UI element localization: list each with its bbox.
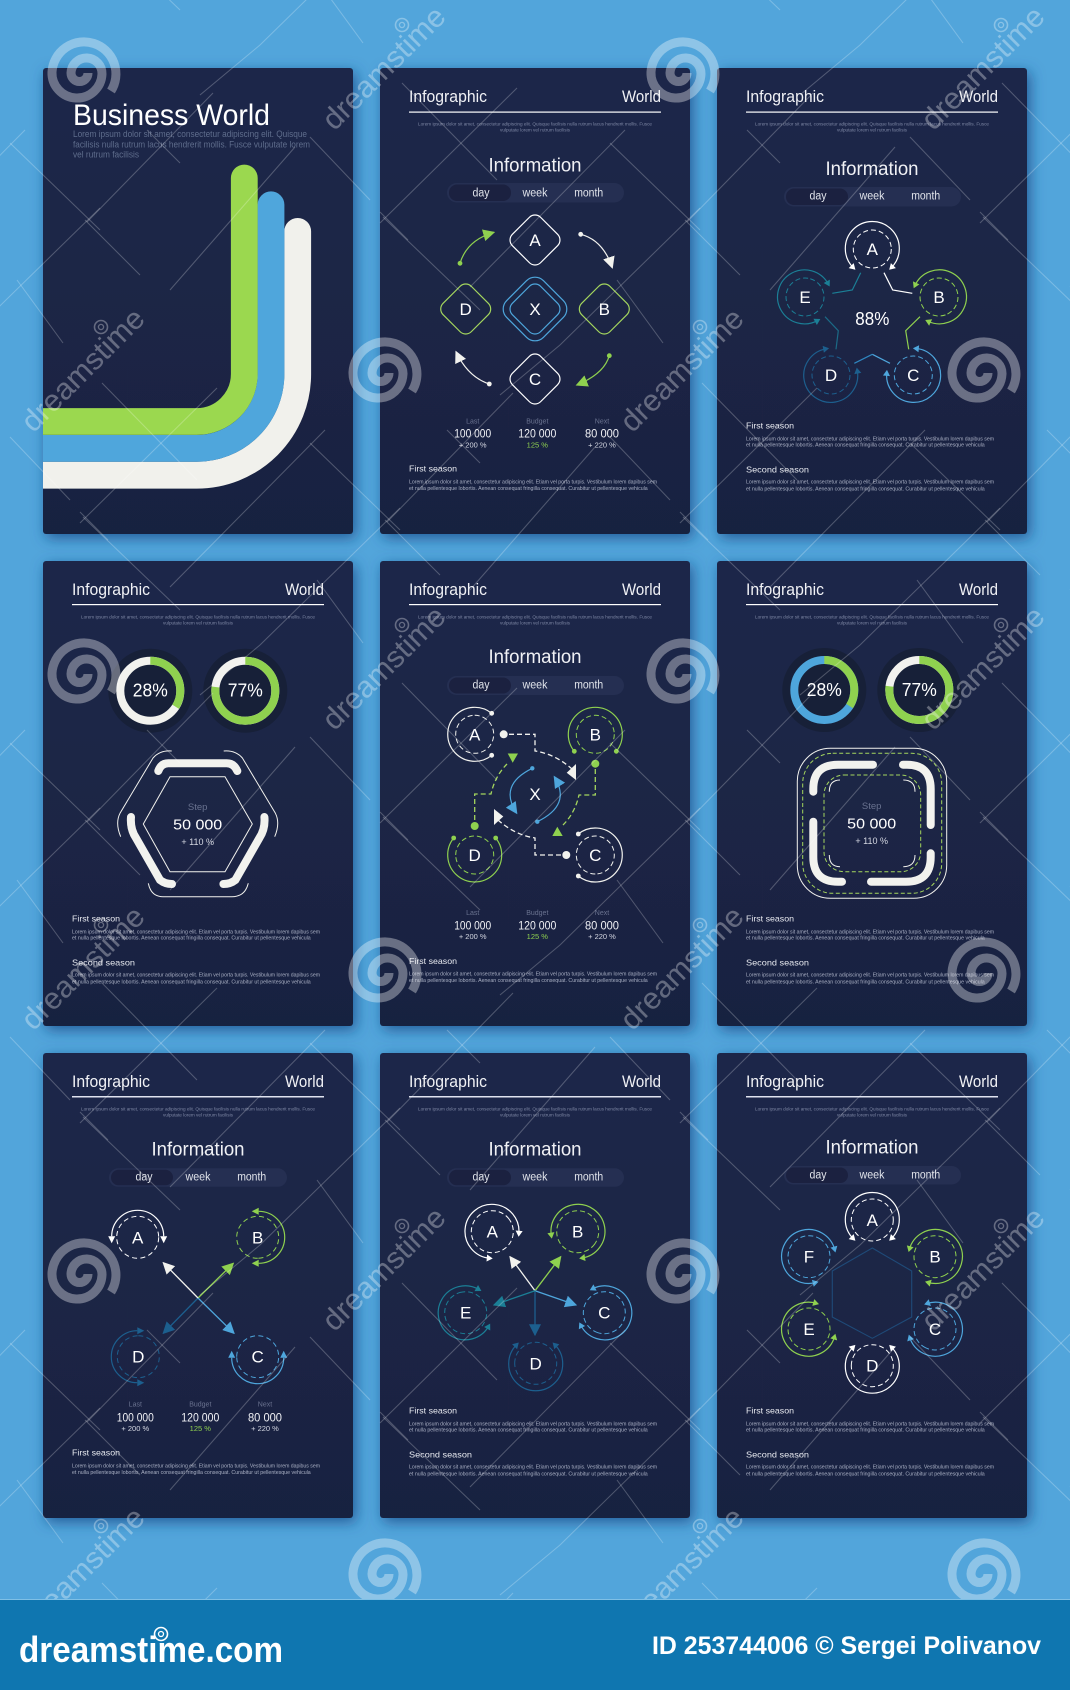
step value: 50 000 <box>173 816 222 833</box>
pentagon ring diagram <box>771 222 974 413</box>
donut 28% <box>782 648 866 732</box>
watermark overlay: dreamstime <box>915 0 1052 137</box>
header: vulputate lorem vel rutrum facilisis <box>500 1112 571 1118</box>
stats: + 200 % <box>459 932 487 941</box>
stats: 120 000 <box>518 428 556 440</box>
header: Lorem ipsum dolor sit amet, consectetur adipiscing elit. Quisque facilisis nulla rutrum lacus hendrerit mollis. Fusce <box>418 1106 653 1112</box>
first season text <box>72 1448 320 1476</box>
network diagram: B <box>590 725 601 744</box>
tabs: week <box>522 680 548 692</box>
cover subtitle <box>73 129 310 160</box>
season text: Second season <box>409 1449 472 1459</box>
radial diagram: C <box>598 1304 610 1323</box>
cover subtitle: vel rutrum facilisis <box>73 150 139 160</box>
season text: et nulla pellentesque lobortis. Aenean consequat fringilla consequat. Curabitur ut pellentesque vehicula <box>746 980 985 986</box>
stats: 120 000 <box>518 920 556 932</box>
header <box>746 87 998 132</box>
tabs: day <box>472 1172 490 1184</box>
stats: 120 000 <box>181 1413 219 1425</box>
pentagon ring diagram: A <box>867 240 879 259</box>
panel: five-way radial arrows <box>380 1053 690 1518</box>
network diagram: C <box>589 846 601 865</box>
cross diagram: D <box>132 1348 144 1367</box>
season text: First season <box>746 913 794 923</box>
season text: et nulla pellentesque lobortis. Aenean consequat fringilla consequat. Curabitur ut pellentesque vehicula <box>746 487 985 493</box>
donut 28% <box>108 649 192 733</box>
stats: 125 % <box>190 1424 211 1433</box>
donut 28%: 28% <box>133 681 168 701</box>
tabs: week <box>522 1172 548 1184</box>
season text <box>746 1405 994 1478</box>
stats: + 220 % <box>588 440 616 449</box>
first season text: Lorem ipsum dolor sit amet, consectetur adipiscing elit. Etiam vel porta turpis. Vestibulum lorem dapibus sem <box>72 1463 320 1469</box>
first season text: Lorem ipsum dolor sit amet, consectetur adipiscing elit. Etiam vel porta turpis. Vestibulum lorem dapibus sem <box>409 479 657 485</box>
season text: Lorem ipsum dolor sit amet, consectetur adipiscing elit. Etiam vel porta turpis. Vestibulum lorem dapibus sem <box>409 1421 657 1427</box>
stats <box>117 1402 282 1433</box>
panel: six-ring hexagon <box>717 1053 1027 1518</box>
stats: 100 000 <box>117 1413 154 1425</box>
tabs: day <box>810 191 827 203</box>
diamond diagram <box>437 212 633 407</box>
step value: Step <box>862 801 881 812</box>
heading: Information <box>826 1137 918 1158</box>
season text: Lorem ipsum dolor sit amet, consectetur adipiscing elit. Etiam vel porta turpis. Vestibulum lorem dapibus sem <box>409 1465 657 1471</box>
season text: et nulla pellentesque lobortis. Aenean consequat fringilla consequat. Curabitur ut pellentesque vehicula <box>409 1428 648 1434</box>
cover title: Business World <box>73 99 270 132</box>
header <box>746 1072 998 1118</box>
first season text: First season <box>409 956 457 966</box>
step value: + 110 % <box>181 837 214 847</box>
season text: First season <box>72 913 120 923</box>
watermark overlay: dreamstime <box>316 1201 453 1338</box>
step value <box>173 802 222 847</box>
season text: Lorem ipsum dolor sit amet, consectetur adipiscing elit. Etiam vel porta turpis. Vestibulum lorem dapibus sem <box>746 480 994 486</box>
step value: + 110 % <box>855 836 888 846</box>
first season text <box>409 956 657 984</box>
stats: Last <box>129 1402 142 1409</box>
pentagon ring diagram: E <box>799 288 811 307</box>
header: Infographic <box>746 87 824 106</box>
first season text: et nulla pellentesque lobortis. Aenean consequat fringilla consequat. Curabitur ut pellentesque vehicula <box>409 978 648 984</box>
cover subtitle: Lorem ipsum dolor sit amet, consectetur adipiscing elit. Quisque <box>73 129 307 139</box>
season text <box>746 420 994 493</box>
tabs: week <box>185 1172 211 1184</box>
header: World <box>959 1072 998 1091</box>
header: vulputate lorem vel rutrum facilisis <box>500 128 571 132</box>
step value: 50 000 <box>847 815 896 832</box>
stats: 80 000 <box>585 920 619 932</box>
cover subtitle: facilisis nulla rutrum lacus hendrerit mollis. Fusce vulputate lorem <box>73 139 310 149</box>
tabs: day <box>136 1172 153 1184</box>
radial diagram: A <box>487 1223 499 1242</box>
hexagon ring diagram: B <box>929 1248 941 1267</box>
first season text: Lorem ipsum dolor sit amet, consectetur adipiscing elit. Etiam vel porta turpis. Vestibulum lorem dapibus sem <box>409 971 657 977</box>
header: Infographic <box>72 1072 150 1091</box>
tabs <box>447 183 624 202</box>
heading: Information <box>826 159 918 180</box>
header: Lorem ipsum dolor sit amet, consectetur adipiscing elit. Quisque facilisis nulla rutrum lacus hendrerit mollis. Fusce <box>81 1106 316 1112</box>
header <box>72 580 324 626</box>
tabs <box>447 676 624 695</box>
season text: Second season <box>746 957 809 967</box>
panel: diamond cycle <box>380 68 690 534</box>
hexagon ring diagram: A <box>867 1211 879 1230</box>
step value: Step <box>188 802 207 813</box>
first season text: et nulla pellentesque lobortis. Aenean consequat fringilla consequat. Curabitur ut pellentesque vehicula <box>409 486 648 492</box>
tabs: month <box>574 188 603 200</box>
rounded square frame <box>797 748 947 898</box>
hexagon ring diagram: F <box>804 1248 814 1267</box>
stats: + 220 % <box>251 1424 279 1433</box>
hexagon ring diagram: D <box>866 1357 878 1376</box>
donut 77% <box>877 648 961 732</box>
watermark overlay: dreamstime <box>15 302 152 439</box>
season text: et nulla pellentesque lobortis. Aenean consequat fringilla consequat. Curabitur ut pellentesque vehicula <box>72 980 311 986</box>
header: Lorem ipsum dolor sit amet, consectetur adipiscing elit. Quisque facilisis nulla rutrum lacus hendrerit mollis. Fusce <box>81 614 316 620</box>
pentagon ring diagram: D <box>825 366 837 385</box>
stats: 100 000 <box>454 920 491 932</box>
stats: 80 000 <box>248 1413 282 1425</box>
season text: Lorem ipsum dolor sit amet, consectetur adipiscing elit. Etiam vel porta turpis. Vestibulum lorem dapibus sem <box>746 1421 994 1427</box>
season text: Second season <box>746 1449 809 1459</box>
stats: Budget <box>526 910 548 917</box>
heading: Information <box>152 1140 244 1161</box>
watermark overlay: dreamstime <box>316 600 453 737</box>
network diagram: A <box>469 725 481 744</box>
season text: et nulla pellentesque lobortis. Aenean consequat fringilla consequat. Curabitur ut pellentesque vehicula <box>746 1472 985 1478</box>
header: World <box>959 580 998 599</box>
watermark overlay: dreamstime <box>915 600 1052 737</box>
season text: et nulla pellentesque lobortis. Aenean consequat fringilla consequat. Curabitur ut pellentesque vehicula <box>409 1472 648 1478</box>
tabs <box>784 1166 961 1184</box>
panel: cover Business World <box>23 68 353 534</box>
stats: Budget <box>526 418 548 425</box>
stats: Next <box>258 1402 272 1409</box>
donut 77% <box>203 649 287 733</box>
donut 77%: 77% <box>228 681 263 701</box>
header <box>746 580 998 626</box>
footer logo: dreamstime.com <box>19 1629 283 1670</box>
season text: Lorem ipsum dolor sit amet, consectetur adipiscing elit. Etiam vel porta turpis. Vestibulum lorem dapibus sem <box>746 1465 994 1471</box>
pentagon ring diagram: B <box>933 288 945 307</box>
panel: donuts and hexagon <box>43 561 353 1026</box>
stats: 125 % <box>527 932 548 941</box>
header: vulputate lorem vel rutrum facilisis <box>837 128 908 132</box>
watermark overlay: dreamstime <box>915 1201 1052 1338</box>
tabs: week <box>859 191 885 203</box>
panel: five-step pentagon cycle <box>717 68 1027 534</box>
hexagon ring diagram <box>772 1193 972 1393</box>
tabs: month <box>911 1169 940 1181</box>
central percent: 88% <box>855 309 889 329</box>
diamond diagram: A <box>529 231 541 250</box>
header: vulputate lorem vel rutrum facilisis <box>163 620 234 626</box>
stats: Next <box>595 418 609 425</box>
tabs: day <box>810 1169 827 1181</box>
header: World <box>622 1072 661 1091</box>
watermark overlay: dreamstime <box>614 900 751 1037</box>
stats: Last <box>466 418 479 425</box>
season text <box>746 913 994 986</box>
tabs: day <box>472 188 490 200</box>
panel: X network <box>380 561 690 1026</box>
heading: Information <box>488 647 582 668</box>
donut 77%: 77% <box>902 680 937 700</box>
header: World <box>622 87 661 106</box>
first season text: First season <box>409 464 457 474</box>
header: World <box>285 580 324 599</box>
header <box>409 580 661 626</box>
season text: Second season <box>72 957 135 967</box>
stats: + 200 % <box>121 1424 149 1433</box>
curved colour bands <box>23 178 298 475</box>
header: Infographic <box>72 580 150 599</box>
watermark overlay: dreamstime <box>15 1501 152 1638</box>
season text: Lorem ipsum dolor sit amet, consectetur adipiscing elit. Etiam vel porta turpis. Vestibulum lorem dapibus sem <box>72 929 320 935</box>
heading: Information <box>488 156 582 177</box>
header: vulputate lorem vel rutrum facilisis <box>837 620 908 626</box>
header: Lorem ipsum dolor sit amet, consectetur adipiscing elit. Quisque facilisis nulla rutrum lacus hendrerit mollis. Fusce <box>418 122 653 126</box>
header: vulputate lorem vel rutrum facilisis <box>500 620 571 626</box>
tabs: month <box>574 680 603 692</box>
stats: + 200 % <box>459 440 487 449</box>
tabs: day <box>472 680 490 692</box>
header <box>409 1072 661 1118</box>
tabs <box>109 1168 287 1187</box>
stats: + 220 % <box>588 932 616 941</box>
tabs: month <box>911 191 940 203</box>
tabs <box>447 1168 624 1187</box>
tabs: week <box>522 188 548 200</box>
cross diagram: A <box>132 1228 144 1247</box>
stats: Next <box>595 910 609 917</box>
footer credit: ID 253744006 © Sergei Polivanov <box>652 1632 1041 1660</box>
cross diagram: C <box>252 1348 264 1367</box>
stats <box>454 418 619 449</box>
season text <box>409 1405 657 1478</box>
season text: Second season <box>746 464 809 474</box>
radial diagram: E <box>460 1304 471 1323</box>
header: World <box>959 87 998 106</box>
stats: Last <box>466 910 479 917</box>
tabs: week <box>859 1169 885 1181</box>
header <box>72 1072 324 1118</box>
radial diagram: B <box>572 1223 583 1242</box>
panel: crossed arrows <box>43 1053 353 1518</box>
header: Lorem ipsum dolor sit amet, consectetur adipiscing elit. Quisque facilisis nulla rutrum lacus hendrerit mollis. Fusce <box>755 1106 990 1112</box>
diamond diagram: B <box>599 300 610 319</box>
network diagram: D <box>469 846 481 865</box>
stats <box>454 910 619 941</box>
tabs <box>784 187 961 206</box>
hexagon ring diagram: E <box>803 1320 815 1339</box>
season text: First season <box>746 1405 794 1415</box>
header: Lorem ipsum dolor sit amet, consectetur adipiscing elit. Quisque facilisis nulla rutrum lacus hendrerit mollis. Fusce <box>755 614 990 620</box>
network diagram <box>448 707 622 882</box>
heading: Information <box>488 1140 582 1161</box>
watermark overlay: dreamstime <box>15 900 152 1037</box>
hexagon frame <box>118 751 278 897</box>
cross diagram <box>108 1208 287 1386</box>
header: Infographic <box>746 580 824 599</box>
diamond diagram: D <box>460 300 472 319</box>
header: Lorem ipsum dolor sit amet, consectetur adipiscing elit. Quisque facilisis nulla rutrum lacus hendrerit mollis. Fusce <box>418 614 653 620</box>
header <box>409 87 661 132</box>
season text: et nulla pellentesque lobortis. Aenean consequat fringilla consequat. Curabitur ut pellentesque vehicula <box>746 1428 985 1434</box>
season text: Lorem ipsum dolor sit amet, consectetur adipiscing elit. Etiam vel porta turpis. Vestibulum lorem dapibus sem <box>746 929 994 935</box>
header: vulputate lorem vel rutrum facilisis <box>837 1112 908 1118</box>
diamond diagram: C <box>529 370 541 389</box>
season text: et nulla pellentesque lobortis. Aenean consequat fringilla consequat. Curabitur ut pellentesque vehicula <box>746 936 985 942</box>
header: Lorem ipsum dolor sit amet, consectetur adipiscing elit. Quisque facilisis nulla rutrum lacus hendrerit mollis. Fusce <box>755 122 990 126</box>
first season text <box>409 464 657 492</box>
stats: 80 000 <box>585 428 619 440</box>
stats: Budget <box>189 1402 211 1409</box>
footer bar <box>0 1599 1070 1690</box>
pentagon ring diagram: C <box>907 366 919 385</box>
donut 28%: 28% <box>807 680 842 700</box>
watermark overlay: dreamstime <box>316 0 453 137</box>
radial diagram <box>432 1193 639 1391</box>
season text: Lorem ipsum dolor sit amet, consectetur adipiscing elit. Etiam vel porta turpis. Vestibulum lorem dapibus sem <box>746 973 994 979</box>
header: World <box>622 580 661 599</box>
watermark overlay: dreamstime <box>614 302 751 439</box>
header: vulputate lorem vel rutrum facilisis <box>163 1112 234 1118</box>
header: Infographic <box>746 1072 824 1091</box>
diamond diagram: X <box>529 300 541 319</box>
season text: et nulla pellentesque lobortis. Aenean consequat fringilla consequat. Curabitur ut pellentesque vehicula <box>746 443 985 449</box>
header: Infographic <box>409 1072 487 1091</box>
step value <box>847 801 896 846</box>
hexagon ring diagram: C <box>929 1320 941 1339</box>
first season text: First season <box>72 1448 120 1458</box>
season text: First season <box>746 420 794 430</box>
season text: Lorem ipsum dolor sit amet, consectetur adipiscing elit. Etiam vel porta turpis. Vestibulum lorem dapibus sem <box>72 973 320 979</box>
radial diagram: D <box>530 1354 542 1373</box>
first season text: et nulla pellentesque lobortis. Aenean consequat fringilla consequat. Curabitur ut pellentesque vehicula <box>72 1470 311 1476</box>
watermark overlay: dreamstime <box>614 1501 751 1638</box>
arrows around the diamonds <box>456 232 612 386</box>
header: World <box>285 1072 324 1091</box>
season text: Lorem ipsum dolor sit amet, consectetur adipiscing elit. Etiam vel porta turpis. Vestibulum lorem dapibus sem <box>746 436 994 442</box>
stats: 100 000 <box>454 428 491 440</box>
season text <box>72 913 320 986</box>
season text: et nulla pellentesque lobortis. Aenean consequat fringilla consequat. Curabitur ut pellentesque vehicula <box>72 936 311 942</box>
cross diagram: B <box>252 1228 263 1247</box>
tabs: month <box>237 1172 266 1184</box>
header: Infographic <box>409 87 487 106</box>
tabs: month <box>574 1172 603 1184</box>
stats: 125 % <box>527 440 548 449</box>
panel: donuts and rounded square <box>717 561 1027 1026</box>
season text: First season <box>409 1405 457 1415</box>
header: Infographic <box>409 580 487 599</box>
network diagram: X <box>529 785 541 804</box>
